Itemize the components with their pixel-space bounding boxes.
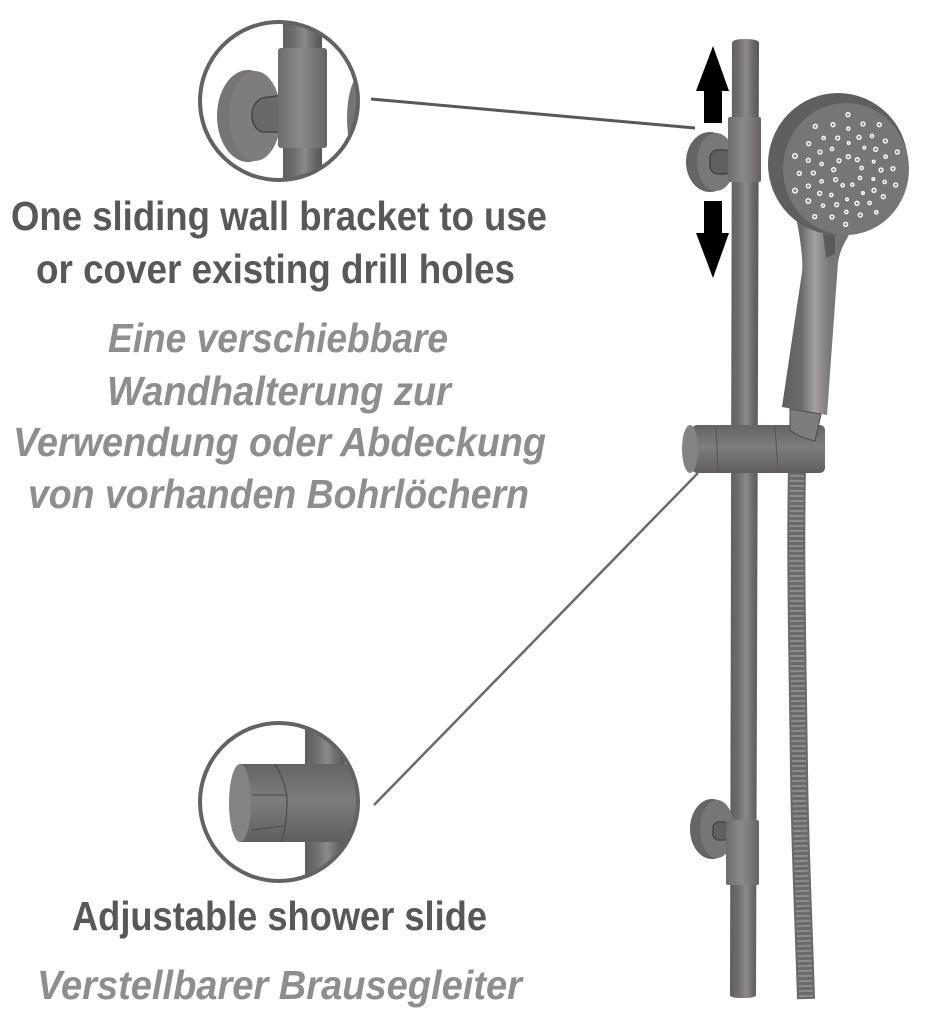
inset: wall bracket detail: [198, 20, 360, 182]
heading: sliding wall bracket (English): or cover existing drill holes: [36, 246, 515, 292]
leader line: top inset to bracket: [371, 99, 695, 128]
product: shower rail set: [682, 39, 909, 999]
bottom wall bracket: [690, 799, 759, 885]
spray nozzles: [793, 113, 899, 226]
text block: sliding wall bracket (German): [13, 315, 546, 517]
text block: sliding wall bracket (German): von vorhanden Bohrlöchern: [28, 471, 529, 517]
rail: [730, 39, 759, 998]
heading: sliding wall bracket (English): [11, 193, 547, 292]
text block: sliding wall bracket (German): Verwendung oder Abdeckung: [13, 419, 546, 465]
hose: [796, 470, 806, 999]
swivel neck: [790, 409, 821, 441]
inset: shower slide detail: [200, 715, 365, 890]
text block: sliding wall bracket (German): Wandhalterung zur: [107, 368, 453, 414]
leader line: bottom inset to slide: [374, 473, 698, 805]
text block: adjustable shower slide (German): Verstellbarer Brausegleiter: [37, 962, 524, 1008]
shower head: [768, 93, 909, 235]
heading: sliding wall bracket (English): One sliding wall bracket to use: [11, 193, 547, 239]
shower handle: [782, 212, 860, 415]
text block: sliding wall bracket (German): Eine verschiebbare: [108, 315, 448, 361]
top wall bracket: [686, 117, 761, 192]
adjustable slide: [682, 409, 825, 473]
icon: double arrow up and down: [696, 46, 729, 278]
heading: adjustable shower slide (English): Adjustable shower slide: [72, 893, 487, 939]
